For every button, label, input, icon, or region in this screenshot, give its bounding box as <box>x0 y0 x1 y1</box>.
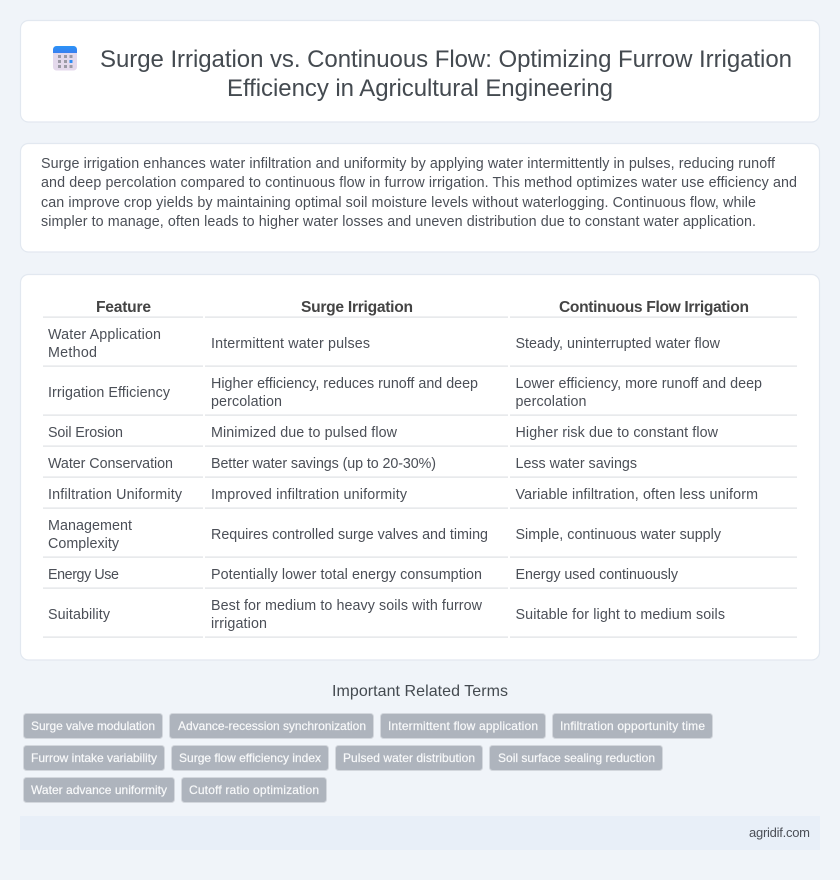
title: Efficiency in Agricultural Engineering <box>227 75 613 102</box>
table header row: Surge Irrigation <box>301 299 413 316</box>
tag: intermittent flow application: Intermittent flow application <box>388 719 538 733</box>
row: management complexity <box>48 518 722 552</box>
row: water application method: Steady, uninterrupted water flow <box>516 336 721 352</box>
footer <box>20 816 820 850</box>
row: irrigation efficiency: Irrigation Efficiency <box>48 385 171 401</box>
tag: pulsed water distribution <box>336 746 482 770</box>
tag: infiltration opportunity time: Infiltration opportunity time <box>560 719 705 733</box>
panel: introduction <box>20 144 820 252</box>
tag: surge valve modulation: Surge valve modulation <box>31 719 155 733</box>
row: water application method: Water Application <box>48 327 161 343</box>
tag: pulsed water distribution: Pulsed water distribution <box>343 751 475 765</box>
row: water application method: Method <box>48 345 97 361</box>
footer: agridif.com <box>749 825 810 840</box>
row: energy use <box>48 567 679 583</box>
row: energy use: Energy Use <box>48 567 119 583</box>
row: suitability <box>48 598 725 632</box>
table header row <box>96 299 749 316</box>
row: energy use: Energy used continuously <box>516 567 679 583</box>
row: suitability: Suitable for light to medium soils <box>516 607 725 623</box>
text block: summary paragraph: Surge irrigation enhances water infiltration and uniformity by applying water intermittently in pulses, reducing runoff <box>41 156 775 172</box>
row: suitability: irrigation <box>211 616 267 632</box>
tag: cutoff ratio optimization: Cutoff ratio optimization <box>189 783 319 797</box>
row: soil erosion: Soil Erosion <box>48 425 123 441</box>
panel: comparison table <box>20 274 820 660</box>
row: management complexity: Complexity <box>48 536 120 552</box>
tag: soil surface sealing reduction: Soil surface sealing reduction <box>498 751 655 765</box>
row: water application method <box>48 327 721 361</box>
table header row: Continuous Flow Irrigation <box>559 299 749 316</box>
row: irrigation efficiency: Higher efficiency, reduces runoff and deep <box>211 376 478 392</box>
icon: calendar grid <box>53 46 77 70</box>
row: suitability: Best for medium to heavy soils with furrow <box>211 598 483 614</box>
text block: summary paragraph: and deep percolation compared to continuous flow in furrow irrigation. This method optimizes water use efficiency and <box>41 175 797 191</box>
tag: surge flow efficiency index: Surge flow efficiency index <box>179 751 321 765</box>
row: infiltration uniformity: Variable infiltration, often less uniform <box>516 487 758 503</box>
row: infiltration uniformity <box>48 487 758 503</box>
tag: water advance uniformity <box>24 778 174 802</box>
table header row: Feature <box>96 299 151 316</box>
tag: intermittent flow application <box>380 714 546 738</box>
tag: surge valve modulation <box>24 714 162 738</box>
row: infiltration uniformity: Improved infiltration uniformity <box>211 487 408 503</box>
row: management complexity: Simple, continuous water supply <box>516 527 722 543</box>
row: irrigation efficiency: Lower efficiency, more runoff and deep <box>516 376 762 392</box>
tag: advance-recession synchronization: Advance-recession synchronization <box>178 719 366 733</box>
title: Surge Irrigation vs. Continuous Flow: Optimizing Furrow Irrigation <box>100 46 792 73</box>
row: soil erosion: Higher risk due to constant flow <box>516 425 719 441</box>
tag: water advance uniformity: Water advance uniformity <box>31 783 167 797</box>
row: water conservation: Less water savings <box>516 456 637 472</box>
row: management complexity: Management <box>48 518 132 534</box>
row: water conservation: Better water savings (up to 20-30%) <box>211 456 436 472</box>
row: management complexity: Requires controlled surge valves and timing <box>211 527 488 543</box>
row: infiltration uniformity: Infiltration Uniformity <box>48 487 183 503</box>
row: soil erosion <box>48 425 719 441</box>
panel: title header <box>20 20 820 122</box>
text block: summary paragraph: can improve crop yields by maintaining optimal soil moisture levels without waterlogging. Continuous flow, while <box>41 195 756 211</box>
tag: soil surface sealing reduction <box>490 746 662 770</box>
row: soil erosion: Minimized due to pulsed flow <box>211 425 398 441</box>
text block: summary paragraph <box>41 156 797 230</box>
text block: summary paragraph: simpler to manage, often leads to higher water losses and uneven distribution due to constant water application. <box>41 214 756 230</box>
tag: advance-recession synchronization <box>170 714 374 738</box>
tag: cutoff ratio optimization <box>182 778 326 802</box>
tag: infiltration opportunity time <box>552 714 712 738</box>
related term tags <box>24 714 712 802</box>
row: irrigation efficiency <box>48 376 762 410</box>
title <box>100 46 792 102</box>
tag: furrow intake variability <box>24 746 164 770</box>
row: energy use: Potentially lower total energy consumption <box>211 567 482 583</box>
row: irrigation efficiency: percolation <box>516 394 587 410</box>
row: irrigation efficiency: percolation <box>211 394 282 410</box>
row: suitability: Suitability <box>48 607 111 623</box>
tag: furrow intake variability: Furrow intake variability <box>31 751 157 765</box>
row: water application method: Intermittent water pulses <box>211 336 370 352</box>
row: water conservation <box>48 456 637 472</box>
heading: important related terms: Important Related Terms <box>332 683 508 700</box>
row: water conservation: Water Conservation <box>48 456 173 472</box>
tag: surge flow efficiency index <box>172 746 328 770</box>
